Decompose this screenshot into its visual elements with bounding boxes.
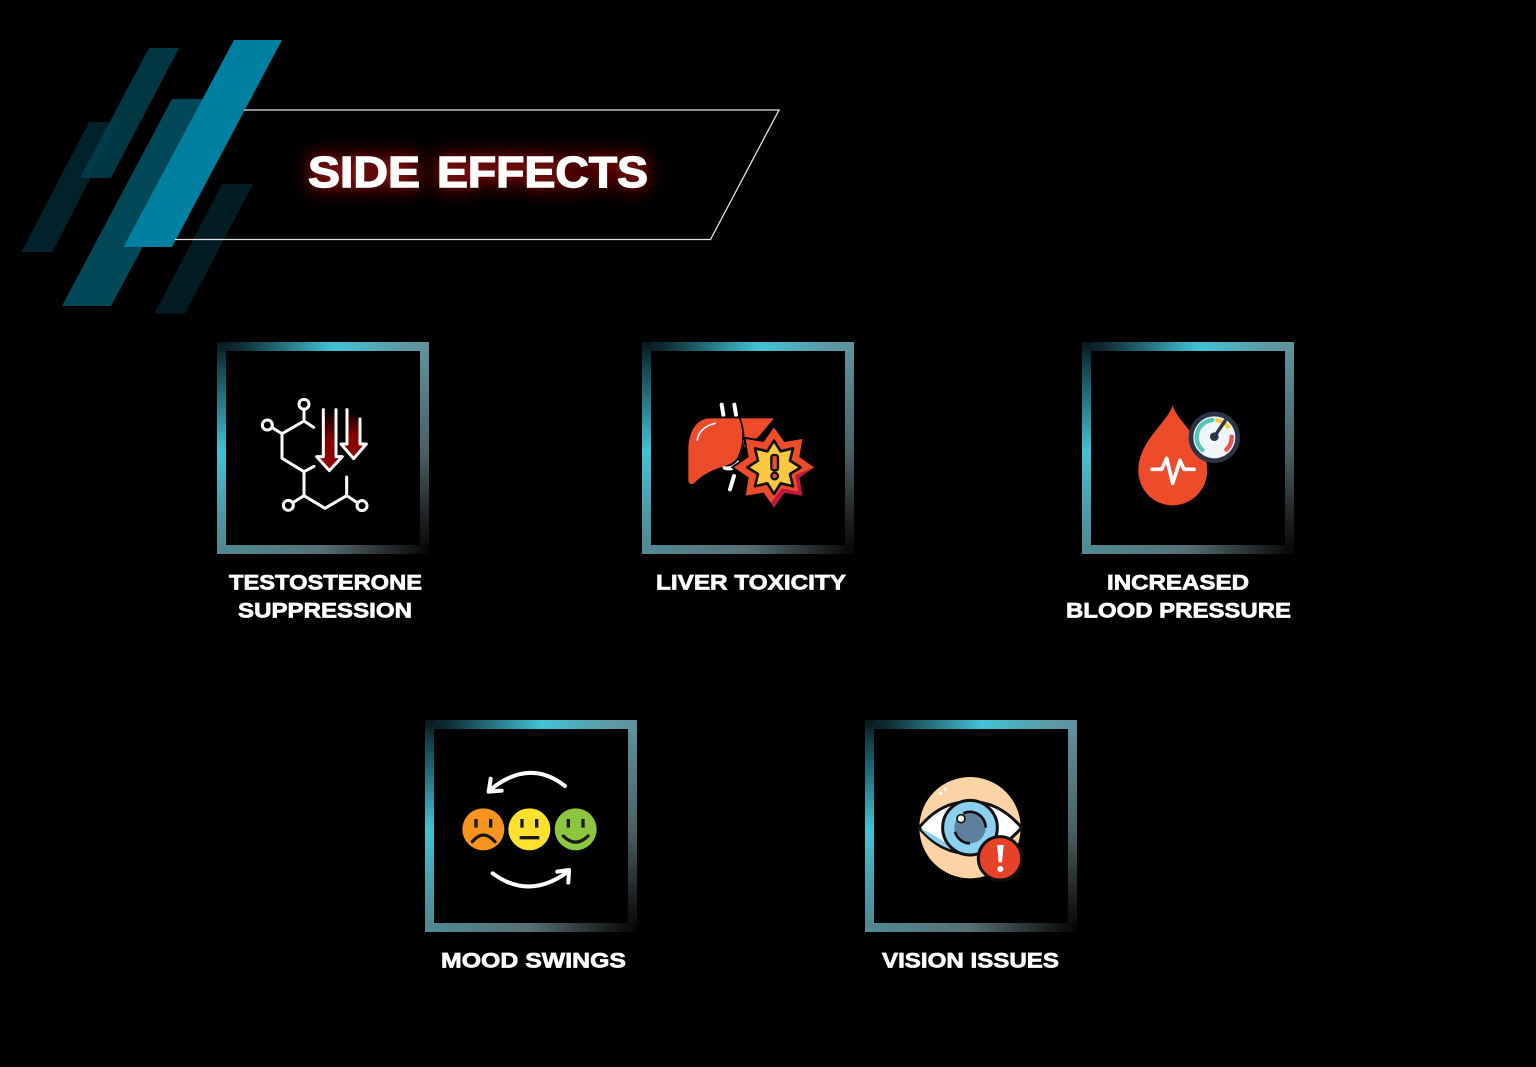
title: SIDE [308, 148, 420, 197]
label [229, 572, 422, 622]
panel: mood swings [425, 720, 637, 972]
icon: mood faces with cycle arrows [462, 773, 597, 887]
icon: blood drop with gauge [1138, 406, 1238, 505]
label: SUPPRESSION [238, 600, 412, 622]
icon: eye with alert badge [919, 777, 1022, 880]
title [308, 148, 648, 197]
panel: liver toxicity [642, 342, 854, 594]
frame [865, 720, 1077, 932]
panel: vision issues [865, 720, 1077, 972]
label: INCREASED [1107, 572, 1249, 594]
panel: increased blood pressure [1066, 342, 1294, 622]
frame [1082, 342, 1294, 554]
label: TESTOSTERONE [229, 572, 422, 594]
frame [217, 342, 429, 554]
frame [425, 720, 637, 932]
title: EFFECTS [437, 148, 648, 197]
label: VISION ISSUES [882, 950, 1059, 972]
decorative slanted stripes [22, 40, 282, 314]
label [1066, 572, 1291, 622]
title banner outline [175, 110, 779, 240]
label: LIVER TOXICITY [656, 572, 846, 594]
label: MOOD SWINGS [441, 950, 626, 972]
frame [642, 342, 854, 554]
icon: molecule with down arrows [262, 399, 367, 511]
title: SIDE [308, 148, 420, 197]
title: EFFECTS [437, 148, 648, 197]
icon: liver with warning burst [688, 405, 814, 507]
label: BLOOD PRESSURE [1066, 600, 1291, 622]
panel: testosterone suppression [217, 342, 429, 622]
